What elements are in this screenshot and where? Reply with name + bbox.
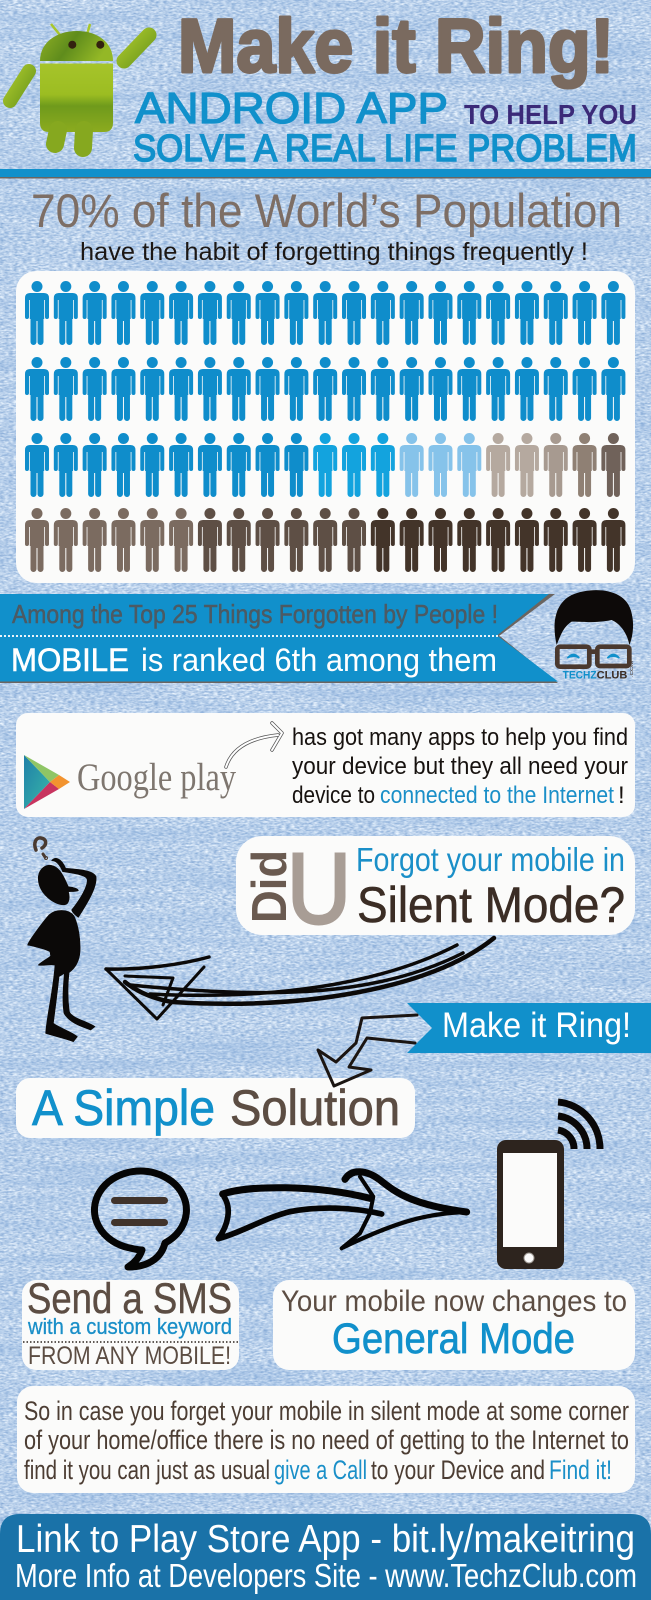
icon: thinking stick figure (28, 858, 96, 1042)
header divider band (0, 169, 651, 178)
footer band (0, 1514, 651, 1600)
text: mobile label: MOBILE (11, 642, 129, 678)
subheading: forgetting habit: have the habit of forgetting things frequently ! (80, 238, 588, 266)
question mark above figure (35, 838, 48, 860)
subtitle: android app: ANDROID APP (135, 84, 448, 133)
icon: techzclub logo: .COM (629, 661, 635, 677)
panel: google play (16, 713, 635, 817)
title: Make it Ring! (178, 4, 614, 89)
icon: techzclub logo: TECHZ (563, 670, 597, 682)
arrow: sms to phone (218, 1172, 467, 1248)
heading: 70 percent: 70% of the World’s Population (31, 184, 622, 237)
panel: a simple solution (16, 1078, 415, 1138)
icon: techzclub logo (555, 590, 635, 682)
text: did rotated: Did (243, 850, 297, 923)
icon: speech bubble (94, 1171, 186, 1267)
panel: general mode (273, 1280, 635, 1370)
text: a simple: A Simple (32, 1080, 215, 1136)
icon: phone with signal (497, 1102, 600, 1269)
text: from any mobile: FROM ANY MOBILE! (28, 1342, 231, 1370)
panel: did u forgot (236, 833, 635, 945)
arrow: sketch arrow to figure (106, 938, 494, 1019)
text: among the top 25: Among the Top 25 Things Forgotten by People ! (12, 599, 498, 629)
row 2 of people (25, 357, 625, 421)
text: google play: Google play (77, 756, 236, 799)
text: connected to the internet: connected to the Internet (380, 782, 614, 809)
text: apps line 3 start: device to (292, 782, 375, 809)
text: exclamation: ! (618, 782, 625, 809)
text: your mobile now changes to: Your mobile now changes to (281, 1285, 627, 1318)
ribbon banner: top 25 things (0, 594, 558, 683)
text: big U: U (287, 833, 351, 945)
row 1 of people (25, 281, 625, 345)
icon: android robot (10, 24, 149, 148)
row 4 of people (25, 508, 625, 572)
panel: people chart (16, 271, 635, 583)
arrow: from google play to text (226, 723, 282, 767)
panel: conclusion text (17, 1386, 635, 1493)
row 3 of people (25, 433, 625, 497)
text: conclusion line 3 start: find it you can just as usual (24, 1455, 270, 1485)
text: send a sms: Send a SMS (27, 1275, 232, 1323)
text: give a call: give a Call (274, 1455, 367, 1485)
text: custom keyword: with a custom keyword (27, 1314, 232, 1339)
icon: play triangle (24, 755, 70, 809)
text: solution: Solution (230, 1080, 400, 1136)
ribbon: make it ring (407, 1003, 651, 1053)
icon: techzclub logo: CLUB (597, 670, 627, 682)
text: is ranked 6th: is ranked 6th among them (141, 642, 497, 678)
arrow: sketch arrow to solution (318, 1015, 417, 1086)
text: general mode: General Mode (332, 1315, 575, 1363)
ribbon: make it ring: Make it Ring! (442, 1006, 631, 1045)
text: apps line 2: your device but they all need your (292, 753, 628, 780)
text: to your device and: to your Device and (371, 1455, 545, 1485)
panel: send a sms (22, 1275, 239, 1370)
text: find it: Find it! (549, 1455, 612, 1485)
subtitle: to help you: TO HELP YOU (464, 99, 637, 130)
text: silent mode: Silent Mode? (357, 877, 625, 933)
